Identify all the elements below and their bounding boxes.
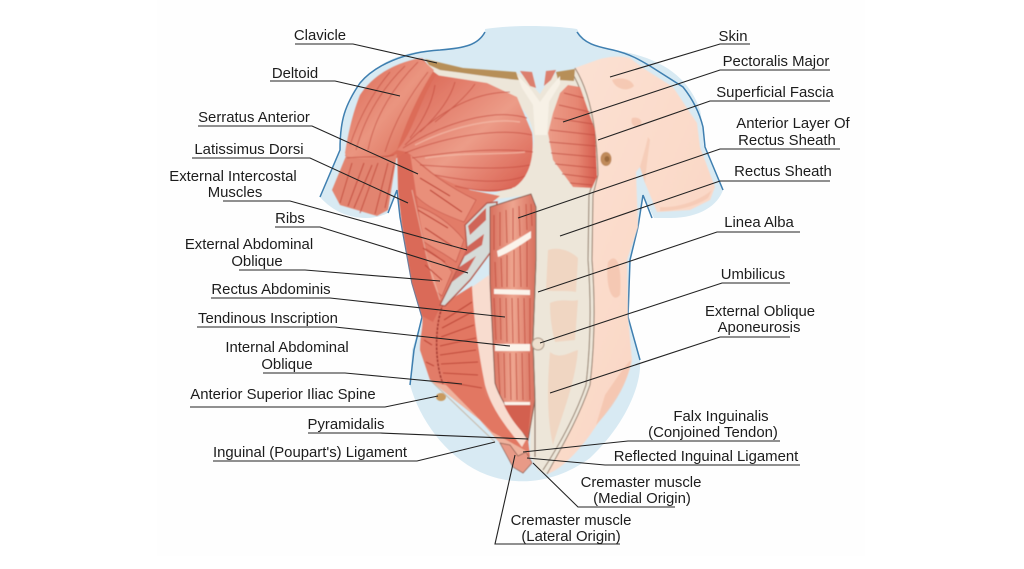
label: Superficial Fascia (598, 85, 834, 140)
label: Latissimus Dorsi (192, 142, 408, 203)
label: External Oblique Aponeurosis: External Oblique (705, 304, 815, 320)
upper pectoral tendon tips (520, 70, 556, 88)
anatomy illustration (332, 57, 715, 474)
arm crease shading (640, 137, 712, 211)
muscle lower edge line (430, 380, 495, 442)
label: Pyramidalis: Pyramidalis (308, 417, 384, 433)
label: Cremaster muscle Medial Origin: Cremaster muscle (581, 475, 701, 491)
label: External Intercostal Muscles: Muscles (208, 185, 262, 201)
pectoral fibers (403, 82, 533, 190)
internal oblique (436, 287, 525, 445)
torso side muscles (397, 150, 530, 473)
label: Serratus Anterior: Serratus Anterior (198, 110, 310, 126)
label: Tendinous Inscription: Tendinous Inscription (198, 311, 338, 327)
label: Pectoralis Major (563, 54, 830, 122)
rectus sheath cream panel (427, 64, 598, 474)
label: Anterior Layer Of Rectus Sheath (518, 116, 851, 218)
deltoid fibers (347, 62, 428, 158)
lat edge strip (398, 152, 442, 322)
blue outline: left (320, 32, 485, 385)
label: Falx Inguinalis: (Conjoined Tendon) (648, 425, 778, 441)
label: Skin (610, 29, 750, 77)
label: External Abdominal Oblique: External Abdominal (185, 237, 313, 253)
dotted side edge (437, 304, 443, 384)
deltoid (345, 58, 434, 162)
right pectoral fibers (549, 93, 596, 185)
umbilicus (532, 338, 544, 350)
label: Cremaster muscle Lateral Origin: (Lateral Origin) (521, 529, 621, 545)
intercostal muscle (452, 208, 486, 282)
nipple (600, 152, 612, 166)
label: Cremaster muscle Medial Origin (533, 463, 701, 507)
tendinous inscriptions (494, 231, 531, 405)
label: Anterior Layer Of Rectus Sheath: Rectus Sheath (738, 133, 836, 149)
fascia double line (543, 68, 598, 474)
right labels (495, 29, 851, 545)
label: External Abdominal Oblique: Oblique (231, 254, 283, 270)
label: Rectus Abdominis (211, 282, 505, 317)
right pectoralis major (548, 85, 597, 188)
pale blue body backdrop (320, 26, 723, 481)
sternal fascia tendon (517, 75, 560, 135)
pyramidalis and lower rectus (504, 405, 531, 438)
label: Clavicle (294, 28, 437, 63)
lower pelvic tip (500, 443, 532, 473)
label: Umbilicus: Umbilicus (721, 267, 785, 283)
body silhouette (320, 26, 723, 481)
label: Anterior Layer Of Rectus Sheath: Anterior Layer Of (736, 116, 851, 132)
lower pink oblique area (432, 382, 528, 473)
serratus digitations (408, 152, 476, 296)
iliac spine (436, 393, 446, 401)
label: Deltoid: Deltoid (272, 66, 318, 82)
label: External Intercostal Muscles (169, 169, 467, 250)
label: External Abdominal Oblique (185, 237, 440, 281)
label: Superficial Fascia: Superficial Fascia (716, 85, 834, 101)
shoulder muscle underlay (345, 58, 445, 158)
sheath peach tendon shading (546, 249, 578, 445)
label: Serratus Anterior (198, 110, 418, 174)
label: Latissimus Dorsi: Latissimus Dorsi (194, 142, 304, 158)
label: External Intercostal Muscles: External Intercostal (169, 169, 297, 185)
label: Linea Alba (538, 215, 800, 292)
label: Pectoralis Major: Pectoralis Major (723, 54, 829, 70)
oblique fibers (418, 178, 482, 388)
label: Ribs: Ribs (275, 211, 305, 227)
label: Reflected Inguinal Ligament (527, 449, 800, 465)
clavicle (425, 59, 575, 81)
linea alba (533, 207, 536, 457)
oblique white aponeurosis band (472, 275, 527, 447)
label: Ribs (275, 211, 468, 273)
rectus fibers (494, 204, 532, 400)
label: Reflected Inguinal Ligament: Reflected Inguinal Ligament (614, 449, 799, 465)
label: Rectus Abdominis: Rectus Abdominis (211, 282, 331, 298)
skin tone patches (596, 78, 642, 425)
label: Falx Inguinalis: Falx Inguinalis (673, 409, 769, 425)
label: Internal Abdominal Oblique: Internal Abdominal (225, 340, 349, 356)
label: Deltoid (270, 66, 400, 96)
label: Anterior Superior Iliac Spine: Anterior Superior Iliac Spine (190, 387, 376, 403)
label: Falx Inguinalis (523, 409, 780, 452)
label: Rectus Sheath (560, 164, 832, 236)
label: Tendinous Inscription (197, 311, 510, 346)
label: External Oblique Aponeurosis: Aponeurosis (718, 320, 800, 336)
label: Clavicle: Clavicle (294, 28, 346, 44)
label: External Oblique Aponeurosis (550, 304, 815, 393)
label: Inguinal Ligament: Inguinal (Poupart's) Ligament (213, 445, 408, 461)
label: Inguinal Ligament (213, 442, 495, 461)
label: Linea Alba: Linea Alba (724, 215, 794, 231)
label: Cremaster muscle Lateral Origin (495, 455, 631, 545)
label: Cremaster muscle Lateral Origin: Cremaster muscle (511, 513, 631, 529)
arm muscle (332, 154, 397, 216)
left pectoralis major (397, 75, 533, 192)
arm fibers (340, 163, 394, 214)
label: Internal Abdominal Oblique (225, 340, 462, 384)
background panel (157, 0, 865, 556)
ribs window (440, 202, 497, 306)
skin layer: right arm and torso (535, 57, 715, 474)
label: Umbilicus (540, 267, 790, 343)
label: Anterior Superior Iliac Spine (190, 387, 438, 407)
label: Pyramidalis (308, 417, 528, 439)
external oblique pale edge (412, 190, 440, 300)
label: Skin: Skin (719, 29, 747, 45)
label: Internal Abdominal Oblique: Oblique (261, 357, 313, 373)
rectus abdominis (490, 194, 536, 440)
left labels (169, 28, 528, 461)
label: Cremaster muscle Medial Origin: (Medial Origin) (593, 491, 691, 507)
blue outline: right (577, 32, 723, 360)
label: Rectus Sheath: Rectus Sheath (734, 164, 832, 180)
